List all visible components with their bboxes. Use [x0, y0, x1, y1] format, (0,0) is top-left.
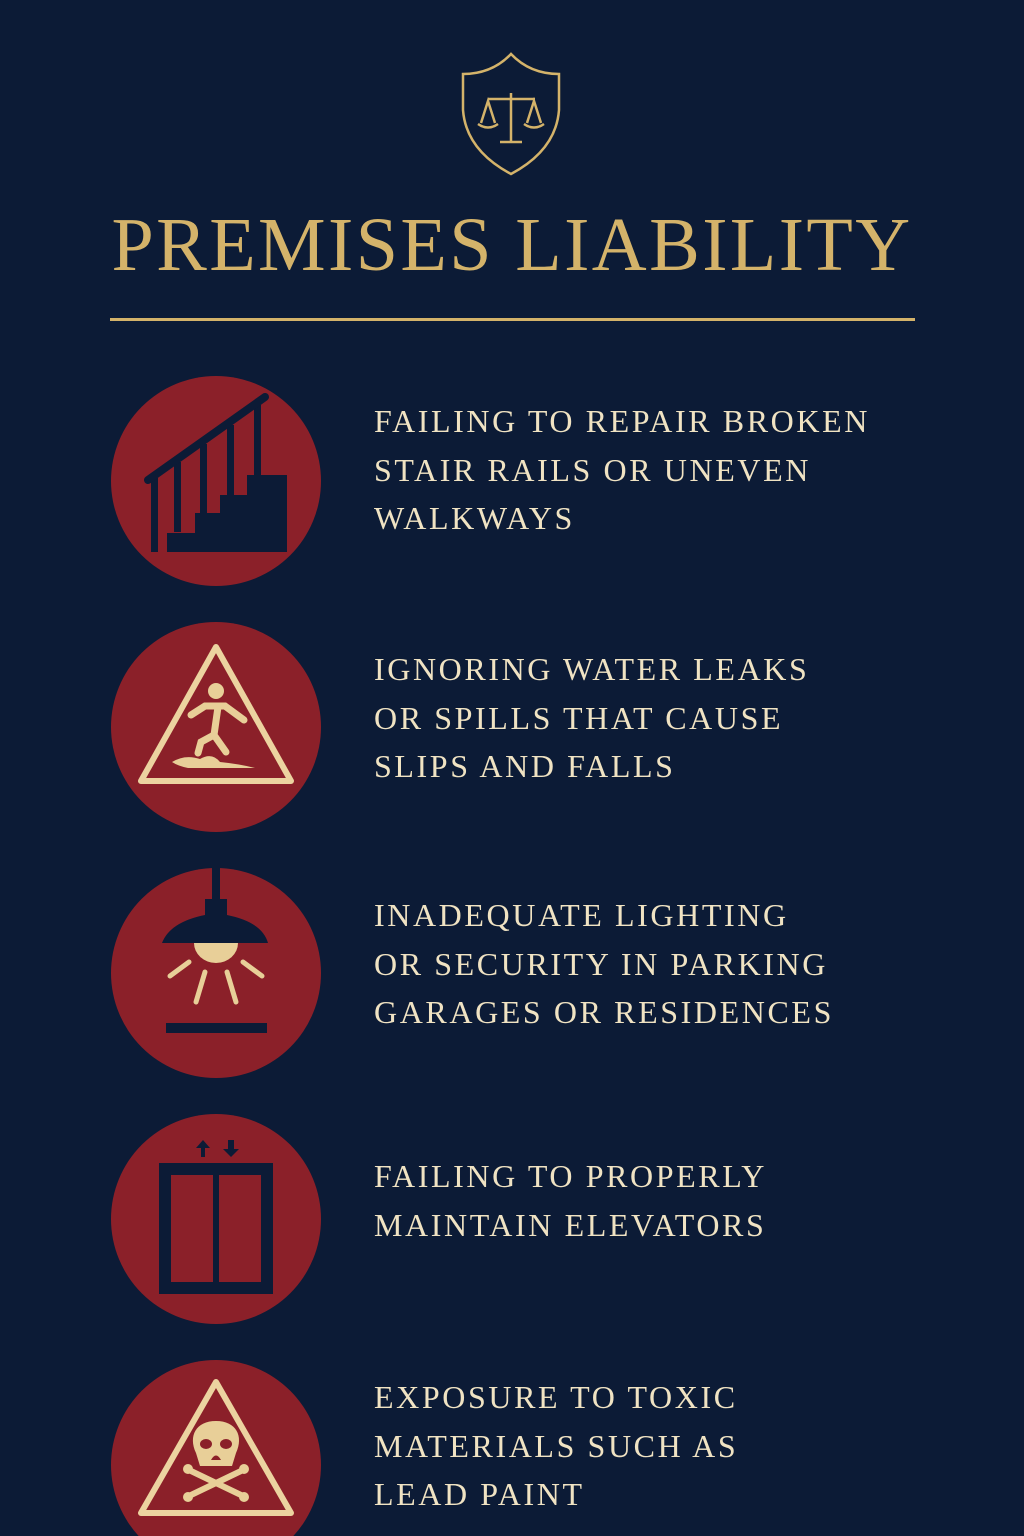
icon: wet floor [111, 622, 321, 832]
text 4: MAINTAIN ELEVATORS [374, 1206, 766, 1242]
icon: elevator [111, 1114, 321, 1324]
icon: toxic [111, 1360, 321, 1536]
icon: stairs [111, 376, 321, 586]
divider [110, 318, 915, 321]
text 5: LEAD PAINT [374, 1476, 585, 1512]
icon: shield with scales [462, 52, 560, 176]
icon: lamp [111, 868, 321, 1078]
text 5: EXPOSURE TO TOXIC [374, 1379, 738, 1415]
text 1 [374, 403, 870, 536]
text 1: STAIR RAILS OR UNEVEN [374, 452, 811, 488]
text 4: FAILING TO PROPERLY [374, 1158, 767, 1194]
text 2: IGNORING WATER LEAKS [374, 651, 809, 687]
text 3: GARAGES OR RESIDENCES [374, 994, 834, 1030]
text 3: INADEQUATE LIGHTING [374, 897, 789, 933]
text 3: OR SECURITY IN PARKING [374, 946, 828, 982]
text 5: MATERIALS SUCH AS [374, 1428, 738, 1464]
text 1: FAILING TO REPAIR BROKEN [374, 403, 870, 439]
text 1: WALKWAYS [374, 500, 575, 536]
title: PREMISES LIABILITY [111, 203, 913, 287]
text 2: OR SPILLS THAT CAUSE [374, 700, 783, 736]
text 2 [374, 651, 809, 784]
text 3 [374, 897, 834, 1030]
text 4 [374, 1158, 767, 1242]
text 5 [374, 1379, 738, 1512]
text 2: SLIPS AND FALLS [374, 748, 676, 784]
